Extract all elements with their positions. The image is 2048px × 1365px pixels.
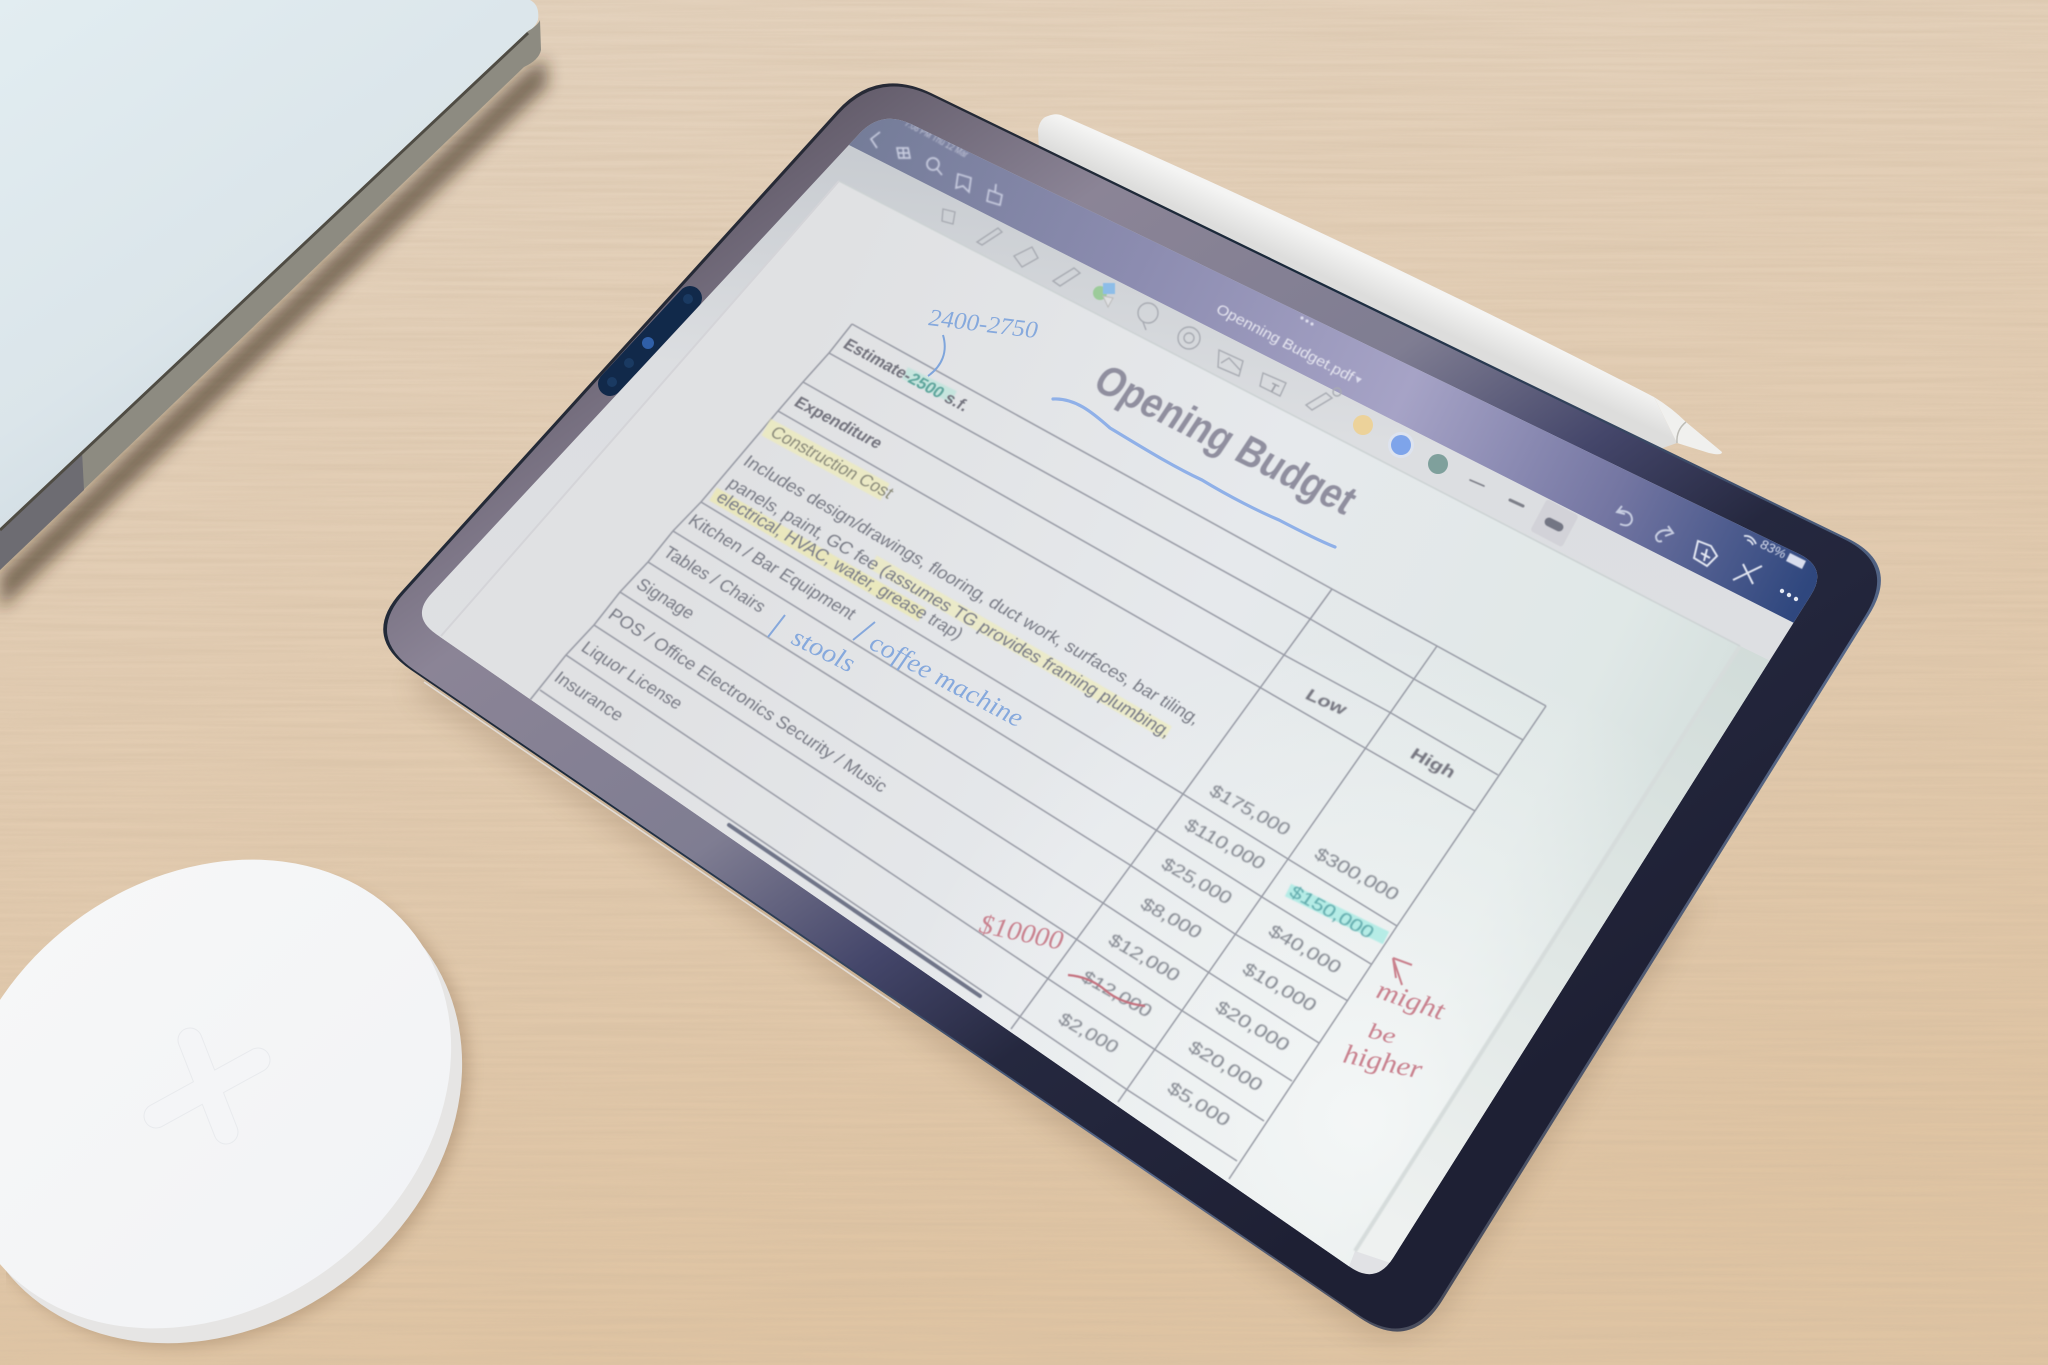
description line 2: panels, paint, GC fee (assumes TG provides framing plumbing, bbox=[724, 473, 1176, 741]
icon: pen bbox=[977, 228, 1002, 245]
stroke widths bbox=[1470, 480, 1579, 547]
icon: shapes bbox=[1093, 283, 1115, 307]
swatch blue bbox=[1388, 432, 1414, 458]
description line 3: electrical, HVAC, water, grease trap) bbox=[713, 487, 967, 643]
highlighter marks bbox=[713, 373, 1386, 938]
note: be: be bbox=[1366, 1017, 1398, 1049]
screen bbox=[422, 118, 1818, 1274]
toolbar icons left bbox=[871, 132, 1002, 205]
icon: bookmark bbox=[956, 174, 971, 192]
icon: image bbox=[1218, 350, 1243, 376]
drawing tools row bbox=[942, 209, 1341, 410]
column headers bbox=[1302, 686, 1459, 782]
icon: new page bbox=[1694, 541, 1717, 566]
high column values: $40,000 bbox=[1265, 921, 1345, 977]
low column values: $110,000 bbox=[1181, 815, 1269, 873]
handwritten red notes bbox=[977, 908, 1450, 1085]
high column values: $10,000 bbox=[1239, 959, 1321, 1015]
home indicator bbox=[729, 825, 980, 996]
icon: undo bbox=[1617, 506, 1632, 525]
icon: text box: T bbox=[1266, 380, 1281, 396]
high column values: $300,000 bbox=[1311, 844, 1403, 904]
swatch green bbox=[1428, 454, 1448, 474]
high column values: $20,000 bbox=[1212, 997, 1294, 1055]
note: stools: stools bbox=[788, 621, 860, 678]
construction cost: Construction Cost bbox=[767, 423, 898, 502]
high column values: $150,000 bbox=[1286, 882, 1378, 942]
toolbar icons right bbox=[1617, 506, 1762, 584]
low column values: $25,000 bbox=[1158, 854, 1236, 908]
icon: eraser bbox=[1014, 247, 1038, 267]
low header: Low bbox=[1302, 686, 1352, 719]
document filename: Openning Budget.pdf bbox=[1213, 302, 1357, 386]
handwritten blue notes bbox=[768, 305, 1039, 733]
swatch yellow bbox=[1353, 415, 1373, 435]
low column values: $12,000 bbox=[1105, 930, 1184, 985]
kitchen row: Kitchen / Bar Equipment bbox=[685, 510, 860, 623]
arrow bbox=[1393, 958, 1412, 985]
tablet bbox=[380, 83, 1881, 1332]
icon: camera sticker bbox=[1178, 327, 1200, 349]
icon: close bbox=[1733, 564, 1762, 584]
icon: grid bbox=[897, 148, 910, 158]
icon: text box bbox=[1260, 373, 1286, 396]
icon: more dots bbox=[1780, 589, 1798, 601]
icon: redo bbox=[1656, 526, 1673, 541]
high header: High bbox=[1407, 745, 1459, 782]
status bar left text: 7:08 PM Thu 12 Mar bbox=[902, 118, 970, 161]
expenditure heading: Expenditure bbox=[791, 393, 886, 452]
note: stools bbox=[768, 615, 860, 678]
status wifi and battery: 83% bbox=[1757, 537, 1789, 561]
note: square footage range: 2400-2750 bbox=[927, 305, 1039, 344]
note: might: might bbox=[1373, 974, 1450, 1026]
strike through bbox=[1068, 975, 1145, 1006]
tablet bezel bbox=[387, 86, 1877, 1328]
low column values: $12,000 bbox=[1078, 967, 1156, 1021]
status wifi and battery bbox=[1744, 536, 1806, 569]
toolbar band bbox=[849, 118, 1818, 623]
low column values: $175,000 bbox=[1206, 781, 1294, 839]
table grid bbox=[530, 324, 1546, 1179]
title underline bbox=[1053, 399, 1335, 547]
wireless charger bbox=[0, 860, 468, 1346]
icon: embossed plus mark bbox=[156, 1040, 258, 1132]
apple pencil bbox=[1038, 114, 1722, 470]
high column values bbox=[1164, 844, 1403, 1130]
icon: share bbox=[987, 184, 1002, 205]
rim highlight lower left bbox=[424, 682, 900, 1008]
note: coffee machine: coffee machine bbox=[866, 626, 1028, 733]
note: revised amount: $10000 bbox=[977, 908, 1066, 956]
low column values: $8,000 bbox=[1137, 894, 1206, 942]
low column values: $2,000 bbox=[1055, 1009, 1123, 1057]
icon: highlighter bbox=[1053, 268, 1080, 286]
description line 1: Includes design/drawings, flooring, duct work, surfaces, bar tiling, bbox=[740, 451, 1205, 728]
document text rows bbox=[551, 335, 1205, 796]
document page bbox=[436, 180, 1792, 1266]
insurance row: Insurance bbox=[551, 667, 628, 725]
icon: laser pointer bbox=[1306, 388, 1341, 410]
note pointer bbox=[928, 335, 945, 376]
signage row: Signage bbox=[633, 575, 699, 623]
pos row: POS / Office Electronics Security / Music bbox=[605, 604, 891, 796]
high column values: $20,000 bbox=[1185, 1037, 1267, 1095]
high column values: $5,000 bbox=[1164, 1078, 1234, 1130]
icon: page tool bbox=[942, 209, 955, 224]
liquor row: Liquor License bbox=[578, 637, 687, 713]
camera notch bbox=[607, 294, 693, 387]
icon: lasso bbox=[1138, 303, 1158, 330]
document title: Opening Budget bbox=[1085, 356, 1366, 524]
icon: back bbox=[871, 132, 880, 148]
low column values bbox=[1055, 781, 1294, 1057]
tablet metal rim bbox=[383, 83, 1881, 1332]
icon: search bbox=[927, 158, 942, 175]
tables row: Tables / Chairs bbox=[660, 542, 770, 616]
estimate row: Estimate-2500 s.f. bbox=[840, 335, 973, 415]
note: higher: higher bbox=[1341, 1038, 1426, 1085]
tablet shadow bbox=[411, 560, 1700, 1337]
chevron and dots in title bar bbox=[1300, 316, 1362, 383]
laptop corner bbox=[0, 0, 548, 610]
ink colour swatches bbox=[1353, 415, 1448, 474]
